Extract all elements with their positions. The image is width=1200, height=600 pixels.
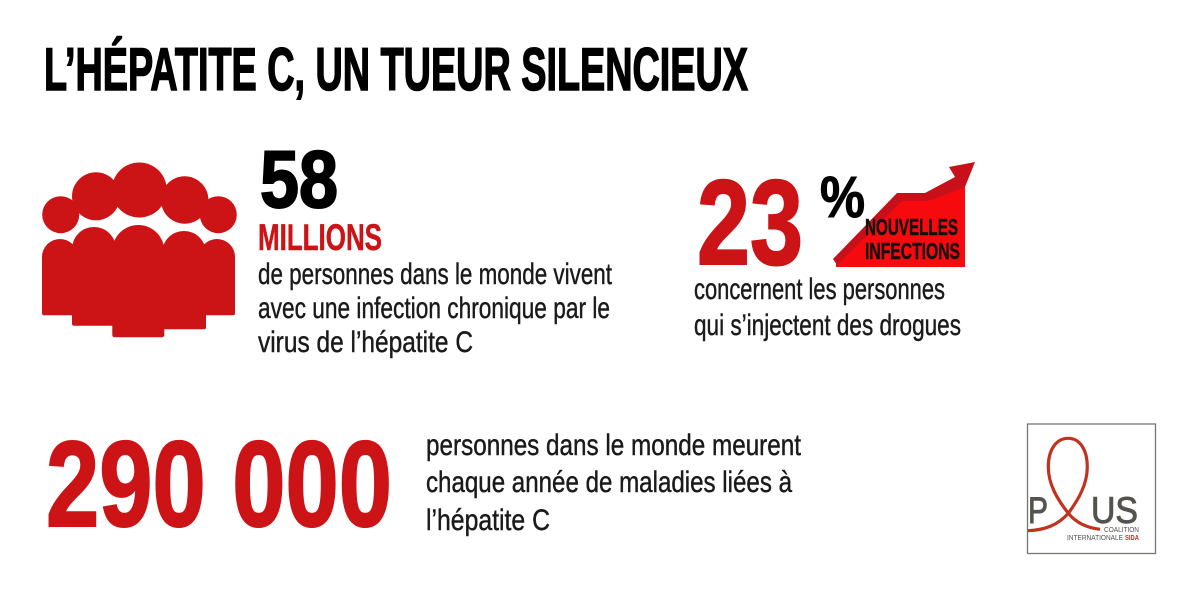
text block: 23 percent description: qui s’injectent des drogues: [694, 309, 961, 342]
stat: 290 000: 290 000: [46, 416, 392, 552]
percent sign: %: [820, 165, 865, 230]
logo: PLUS coalition: P: [1028, 490, 1048, 531]
logo: PLUS coalition: INTERNATIONALE: [1067, 533, 1123, 542]
text block: 23 percent description: [694, 273, 961, 342]
label: nouvelles infections: [865, 214, 960, 264]
text block: 23 percent description: concernent les personnes: [694, 273, 945, 306]
text block: 290 000 description: l’hépatite C: [426, 504, 550, 537]
label: nouvelles infections: INFECTIONS: [865, 238, 960, 264]
text block: 58 millions description: [258, 258, 612, 359]
text block: 290 000 description: personnes dans le monde meurent: [426, 429, 802, 462]
title: L’HÉPATITE C, UN TUEUR SILENCIEUX: [44, 36, 748, 103]
stat: 23 percent: 23: [697, 154, 803, 290]
text block: 290 000 description: chaque année de maladies liées à: [426, 466, 792, 499]
text block: 58 millions description: virus de l’hépatite C: [258, 326, 473, 359]
logo: PLUS coalition: US: [1091, 490, 1138, 531]
logo: PLUS coalition: COALITION: [1104, 525, 1139, 534]
stat: 58 millions: 58: [260, 135, 338, 225]
stat: 58 millions: MILLIONS: [258, 217, 382, 258]
logo: PLUS coalition: [1028, 424, 1156, 554]
logo: PLUS coalition: SIDA: [1125, 533, 1139, 542]
label: nouvelles infections: NOUVELLES: [865, 214, 958, 240]
text block: 290 000 description: [426, 429, 802, 537]
stat: 58 millions: [258, 135, 382, 258]
icon: group of people: [42, 162, 237, 337]
text block: 58 millions description: avec une infection chronique par le: [258, 292, 610, 325]
text block: 58 millions description: de personnes dans le monde vivent: [258, 258, 612, 291]
icon: rising arrow: [833, 162, 975, 267]
